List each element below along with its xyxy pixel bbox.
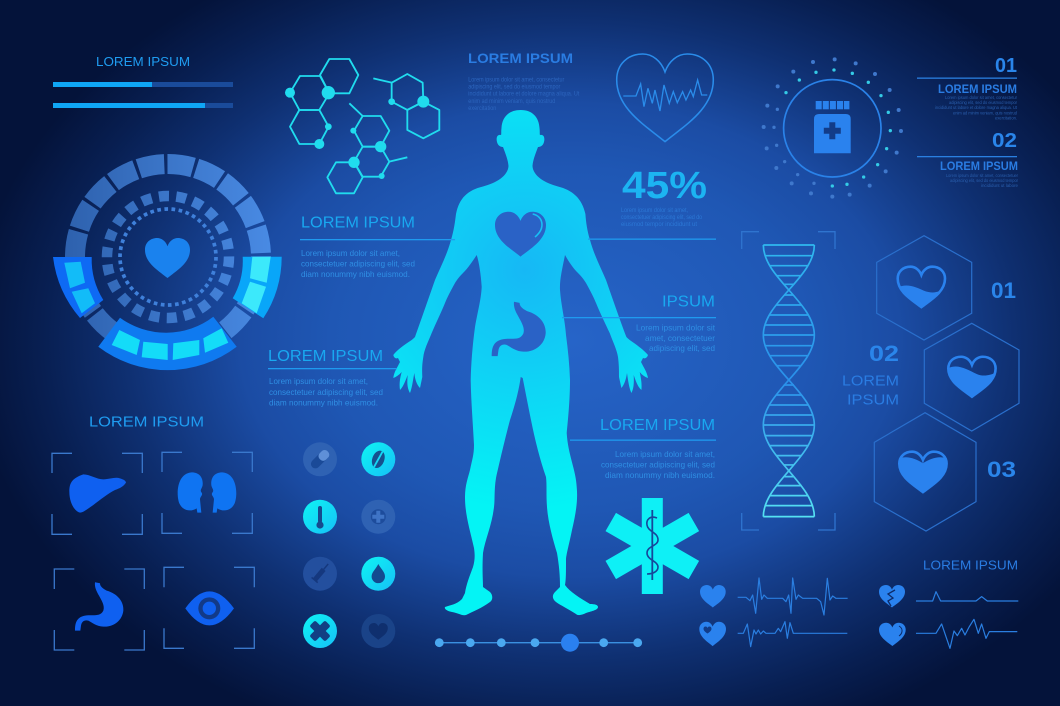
hexagon 2 — [924, 323, 1019, 431]
medicine bottle badge — [762, 57, 903, 199]
text block: top centre: LOREM IPSUM — [468, 50, 573, 66]
item 02: adipiscing elit, sed do eiusmod tempor — [950, 178, 1018, 183]
text block: 45 percent — [588, 165, 716, 240]
label 03: 03 — [987, 457, 1016, 482]
item 01: incididunt ut labore et dolore magna aliqua. Ut — [935, 105, 1018, 110]
DNA helix in bracket frame — [742, 232, 835, 530]
icon: pill — [303, 442, 337, 476]
health icon grid — [303, 442, 395, 648]
text block: top centre: Lorem ipsum dolor sit amet, consectetur — [468, 78, 564, 84]
text block: top centre — [468, 50, 580, 112]
text block: hand callout: diam nonummy nibh euismod. — [269, 398, 378, 408]
label 02: IPSUM — [847, 392, 899, 408]
text block: chest callout — [300, 214, 455, 279]
text block: chest callout: diam nonummy nibh euismod. — [301, 269, 410, 279]
text block: 45 percent: 45% — [622, 165, 707, 207]
text block: hand callout — [268, 348, 397, 408]
text block: hand callout: Lorem ipsum dolor sit amet, — [269, 376, 368, 386]
icon: tablet — [361, 442, 395, 476]
text block: abdomen callout: Lorem ipsum dolor sit — [636, 322, 716, 332]
item 02: LOREM IPSUM — [940, 161, 1018, 173]
helix — [763, 245, 814, 517]
text block: abdomen callout — [562, 294, 716, 353]
text block: top centre: exercitation — [468, 106, 496, 112]
text block: abdomen callout: adipiscing elit, sed — [649, 343, 715, 353]
text block: top centre: adipiscing elit, sed do eiusmod tempor — [468, 85, 560, 91]
text block: 45 percent: Lorem ipsum dolor sit amet, — [621, 207, 688, 214]
timeline slider — [435, 634, 642, 652]
icon: heart monitor — [361, 614, 395, 648]
organ icons panel — [52, 414, 254, 650]
text block: leg callout — [570, 417, 716, 480]
item 01: LOREM IPSUM — [938, 84, 1017, 96]
body — [393, 110, 648, 615]
human body silhouette — [393, 110, 648, 615]
icon: medical cross — [361, 500, 395, 534]
icon: syringe — [303, 557, 337, 591]
inner dotted ring — [120, 209, 216, 305]
text block: hand callout: consectetuer adipiscing elit, sed — [269, 387, 383, 397]
middle square ring — [107, 196, 229, 318]
progress bar 2 — [53, 103, 233, 108]
gauge heart icon — [145, 238, 190, 278]
kidneys icon — [162, 452, 252, 533]
heart radial gauge — [53, 164, 282, 370]
item 01: exercitation. — [995, 116, 1017, 120]
liver icon — [52, 453, 142, 534]
chest heart — [495, 212, 546, 257]
item 02: Lorem ipsum dolor sit amet, consectetuer — [946, 173, 1018, 178]
heart icons — [699, 585, 906, 646]
hexagon 1 — [877, 236, 972, 340]
text block: chest callout: LOREM IPSUM — [301, 214, 415, 232]
text block: chest callout: consectetuer adipiscing elit, sed — [301, 258, 415, 268]
ECG panel — [699, 558, 1018, 648]
stomach icon — [54, 569, 144, 650]
dot halo — [762, 57, 903, 199]
text block: chest callout: Lorem ipsum dolor sit amet, — [301, 248, 400, 258]
icon: blood drop — [361, 557, 395, 591]
text block: abdomen callout: amet, consectetuer — [645, 333, 715, 343]
star of life — [606, 498, 699, 594]
ECG traces — [738, 578, 1018, 648]
heading: LOREM IPSUM — [923, 558, 1018, 572]
bottom highlighted arc — [98, 317, 237, 370]
icon: bandage cross — [303, 614, 337, 648]
item 02: 02 — [992, 130, 1017, 152]
numbered list: top right — [917, 55, 1018, 188]
label 02 — [842, 341, 899, 408]
icon: thermometer — [303, 500, 337, 534]
text block: 45 percent: eiusmod tempor incididunt ut — [621, 221, 697, 228]
item 02: incididunt ut labore — [981, 183, 1018, 188]
badge ring — [784, 80, 881, 177]
right highlighted arc — [233, 257, 282, 318]
hexagon 3 — [874, 413, 976, 531]
eye icon — [164, 567, 254, 648]
label 02: 02 — [869, 341, 899, 366]
item 01 — [917, 55, 1018, 120]
text block: hand callout: LOREM IPSUM — [268, 348, 383, 365]
text block: leg callout: diam nonummy nibh euismod. — [605, 470, 715, 480]
label 02: LOREM — [842, 374, 899, 390]
label 01: 01 — [991, 278, 1016, 303]
item 01: 01 — [995, 55, 1017, 77]
item 01: adipiscing elit, sed do eiusmod tempor — [949, 100, 1017, 105]
item 01: Lorem ipsum dolor sit amet, consectetur — [945, 95, 1017, 100]
left highlighted arc — [53, 257, 103, 318]
text block: leg callout: Lorem ipsum dolor sit amet, — [615, 449, 715, 459]
text block: 45 percent: consectetuer adipiscing elit, sed do — [621, 214, 702, 221]
heading: LOREM IPSUM — [89, 414, 204, 430]
body stomach — [492, 302, 546, 356]
heart outline with ECG — [617, 54, 713, 142]
heading: top left: LOREM IPSUM — [96, 54, 190, 69]
text block: abdomen callout: IPSUM — [662, 294, 715, 310]
item 02 — [917, 130, 1018, 188]
outer segmented ring — [75, 164, 261, 350]
hexagon hearts panel — [842, 236, 1019, 531]
item 01: enim ad minim veniam, quis nostrud — [953, 110, 1017, 116]
molecule diagram — [285, 59, 439, 193]
bottle icon — [814, 101, 851, 153]
frame corners — [742, 232, 835, 530]
text block: leg callout: LOREM IPSUM — [600, 417, 715, 434]
progress bars panel — [53, 54, 233, 108]
text block: leg callout: consectetuer adipiscing elit, sed — [601, 460, 715, 470]
progress bar 1 — [53, 82, 233, 87]
text block: top centre: incididunt ut labore et dolore magna aliqua. Ut — [468, 92, 580, 98]
text block: top centre: enim ad minim veniam, quis nostrud — [468, 99, 555, 105]
